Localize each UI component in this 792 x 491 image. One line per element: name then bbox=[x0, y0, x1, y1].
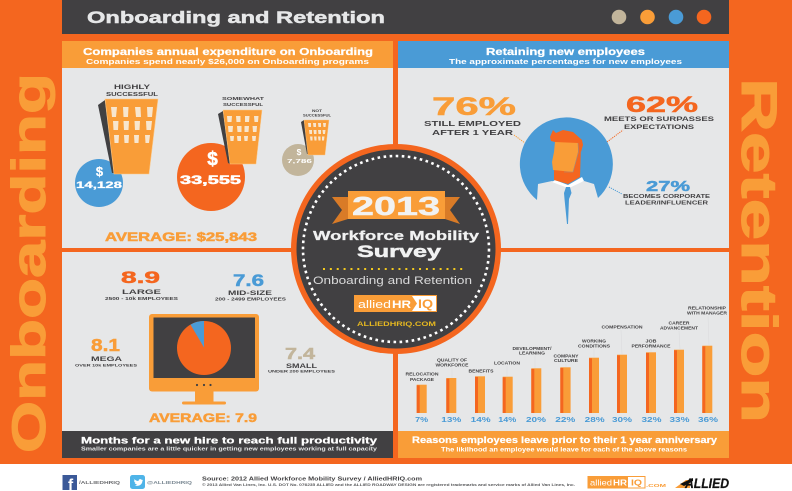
average months: AVERAGE: 7.9 bbox=[149, 411, 257, 425]
somewhat successful: spend circle bbox=[177, 143, 245, 211]
stat: small companies bbox=[268, 346, 335, 374]
bar labels: CAREER bbox=[668, 320, 691, 326]
stat: 27% becomes leader: LEADER/INFLUENCER bbox=[625, 200, 709, 206]
stat: large companies: 2500 - 10k EMPLOYEES bbox=[105, 296, 178, 301]
bar percentages: 33% bbox=[670, 417, 691, 424]
not successful: amount: 7,786 bbox=[287, 159, 313, 165]
highly successful: label: HIGHLY bbox=[114, 85, 150, 91]
highly successful: amount bbox=[76, 164, 122, 190]
pie chart bbox=[177, 321, 231, 375]
bar percentages: 32% bbox=[642, 417, 663, 424]
bar percentages: 28% bbox=[585, 417, 606, 424]
panel footer: Reasons employees leave prior to their 1 year anniversary bbox=[412, 435, 718, 446]
bar labels: RELOCATION bbox=[406, 372, 438, 376]
footer band bbox=[0, 464, 792, 491]
icon: employee portrait bbox=[520, 117, 613, 224]
logo: alliedHR IQ: IQ bbox=[418, 299, 433, 311]
highly successful: amount: $ bbox=[96, 164, 104, 179]
bar percentages: 30% bbox=[612, 417, 633, 424]
logo: alliedHR IQ: HR bbox=[392, 299, 411, 311]
not successful: label: NOT bbox=[312, 109, 322, 113]
highly successful: building icon bbox=[98, 99, 158, 174]
stat: 62% meets or surpasses: EXPECTATIONS bbox=[624, 124, 694, 131]
somewhat successful: label: SUCCESSFUL bbox=[223, 102, 263, 107]
stat: 76% still employed bbox=[424, 93, 521, 137]
stat: mid-size companies: 200 - 2499 EMPLOYEES bbox=[215, 296, 286, 302]
somewhat successful: building icon bbox=[218, 110, 262, 164]
not successful: building icon bbox=[301, 120, 329, 155]
icon: computer monitor with pie chart bbox=[149, 314, 259, 404]
icon: facebook bbox=[62, 475, 77, 491]
bar labels: WITH MANAGER bbox=[687, 310, 728, 316]
panel footer: Smaller companies are a little quicker in getting new employees working at full capacity bbox=[81, 446, 378, 452]
not successful: spend circle bbox=[282, 144, 314, 176]
bar percentages bbox=[415, 417, 719, 424]
bar percentages: 14% bbox=[498, 417, 517, 424]
stat: mid-size companies: 7.6 bbox=[233, 272, 264, 290]
bar labels bbox=[406, 306, 728, 382]
copyright line: © 2013 Allied Van Lines, Inc. U.S. DOT No. 076235 ALLIED and the ALLIED ROADWAY DESIGN are registered trademarks and service marks of Allied Van Lines, Inc. bbox=[202, 483, 575, 487]
panel: reasons employees leave bbox=[398, 252, 729, 458]
bar labels: DEVELOPMENT/ bbox=[512, 346, 552, 351]
stat: small companies: 7.4 bbox=[285, 346, 316, 363]
panel: annual expenditure on onboarding bbox=[62, 41, 393, 248]
stat: large companies bbox=[105, 268, 178, 301]
panel heading bbox=[398, 41, 729, 68]
panel heading: Companies spend nearly $26,000 on Onboarding programs bbox=[86, 57, 369, 66]
logo: alliedHR IQ bbox=[354, 295, 437, 312]
footer logo: alliedHR IQ: IQ bbox=[631, 478, 642, 488]
stat: large companies: LARGE bbox=[122, 289, 162, 296]
badge title: Workforce Mobility bbox=[313, 229, 479, 243]
panel footer: The likilhood an employee would leave for each of the above reasons bbox=[441, 448, 688, 454]
stat: 62% meets or surpasses: MEETS OR SURPASSES bbox=[604, 116, 714, 123]
bar labels: RELATIONSHIP bbox=[688, 306, 726, 310]
bar labels: CONDITIONS bbox=[578, 344, 610, 348]
stat: 76% still employed: 76% bbox=[432, 93, 516, 121]
stat: 62% meets or surpasses: 62% bbox=[626, 92, 698, 117]
bar labels: BENEFITS bbox=[468, 368, 494, 374]
panel footer: Months for a new hire to reach full productivity bbox=[81, 436, 378, 446]
bar labels: PACKAGE bbox=[410, 377, 434, 382]
somewhat successful: amount bbox=[180, 149, 242, 187]
bar labels: COMPENSATION bbox=[602, 324, 642, 330]
bar labels: LOCATION bbox=[494, 360, 520, 366]
connector lines bbox=[514, 130, 623, 194]
not successful: label: SUCCESSFUL bbox=[303, 114, 331, 118]
footer logo: Allied: ALLIED bbox=[684, 476, 729, 491]
stat: small companies: SMALL bbox=[286, 363, 317, 370]
stat: mid-size companies bbox=[215, 272, 286, 302]
not successful: amount bbox=[287, 147, 313, 165]
bar labels: QUALITY OF bbox=[437, 358, 467, 362]
stat: mega companies: OVER 10k EMPLOYEES bbox=[75, 362, 137, 368]
bar percentages: 22% bbox=[555, 417, 576, 424]
side title: Retention: Retention bbox=[731, 78, 787, 423]
panel heading: Companies annual expenditure on Onboarding bbox=[83, 47, 373, 58]
panel heading bbox=[62, 41, 393, 68]
stat: mega companies: MEGA bbox=[91, 356, 123, 363]
icon: twitter bbox=[130, 475, 145, 489]
somewhat successful: label: SOMEWHAT bbox=[222, 96, 264, 102]
footer logo suffix: .COM bbox=[646, 483, 666, 489]
stat: 27% becomes leader bbox=[623, 178, 711, 206]
panel: retaining new employees bbox=[398, 41, 729, 248]
stat: mega companies: 8.1 bbox=[91, 335, 120, 355]
footer logo: alliedHR IQ bbox=[588, 476, 646, 488]
bar percentages: 14% bbox=[471, 417, 492, 424]
bar labels: JOB bbox=[646, 338, 656, 344]
highly successful: amount: 14,128 bbox=[76, 180, 122, 190]
stat: large companies: 8.9 bbox=[121, 268, 160, 287]
twitter handle: @ALLIEDHRIQ bbox=[147, 480, 193, 485]
title: Onboarding and Retention bbox=[87, 9, 385, 27]
panel heading: Retaining new employees bbox=[486, 47, 646, 58]
colour dots bbox=[612, 10, 711, 24]
somewhat successful: amount: $ bbox=[207, 149, 218, 170]
source line: Source: 2012 Allied Workforce Mobility Survey / AlliedHRIQ.com bbox=[202, 476, 423, 482]
stat: mid-size companies: MID-SIZE bbox=[228, 290, 272, 297]
stat: 27% becomes leader: 27% bbox=[646, 178, 690, 195]
not successful: label bbox=[303, 109, 331, 118]
central survey badge bbox=[291, 144, 501, 354]
highly successful: spend circle bbox=[75, 159, 123, 207]
bar labels: COMPANY bbox=[554, 354, 579, 358]
badge title: Survey bbox=[357, 243, 442, 261]
facebook handle: /ALLIEDHRIQ bbox=[79, 480, 121, 485]
bar percentages: 36% bbox=[698, 417, 719, 424]
ribbon with year bbox=[332, 191, 460, 224]
bar labels: CULTURE bbox=[554, 358, 578, 363]
badge title bbox=[313, 229, 479, 261]
bar labels: WORKFORCE bbox=[436, 362, 469, 368]
somewhat successful: amount: 33,555 bbox=[180, 173, 242, 187]
bar labels: PERFORMANCE bbox=[632, 344, 671, 348]
average expenditure: AVERAGE: $25,843 bbox=[105, 230, 257, 244]
bar labels: WORKING bbox=[582, 338, 607, 344]
stat: 62% meets or surpasses bbox=[604, 92, 714, 131]
bar labels: LEARNING bbox=[519, 350, 546, 356]
logo: alliedHR IQ: allied bbox=[358, 299, 391, 311]
badge subtitle: Onboarding and Retention bbox=[313, 275, 472, 287]
bar chart bbox=[406, 306, 728, 424]
panel heading: The approximate percentages for new employees bbox=[449, 57, 682, 66]
panel: months to full productivity bbox=[62, 252, 393, 458]
highly successful: label: SUCCESSFUL bbox=[106, 92, 158, 98]
somewhat successful: label bbox=[222, 96, 264, 107]
footer logo: alliedHR IQ: allied bbox=[590, 478, 612, 488]
bar labels: ADVANCEMENT bbox=[660, 326, 698, 330]
stat: 76% still employed: AFTER 1 YEAR bbox=[432, 130, 513, 137]
stat: 27% becomes leader: BECOMES CORPORATE bbox=[623, 194, 711, 200]
stat: 76% still employed: STILL EMPLOYED bbox=[424, 121, 521, 128]
ribbon with year: 2013 bbox=[352, 191, 440, 221]
website: ALLIEDHRIQ.COM bbox=[357, 322, 436, 328]
stat: mega companies bbox=[75, 335, 137, 368]
side title: Onboarding: Onboarding bbox=[2, 73, 55, 453]
bar percentages: 20% bbox=[526, 417, 547, 424]
stat: small companies: UNDER 200 EMPLOYEES bbox=[268, 368, 335, 374]
bar percentages: 13% bbox=[441, 417, 462, 424]
bar percentages: 7% bbox=[415, 417, 429, 424]
panel footer bbox=[398, 431, 729, 458]
highly successful: label bbox=[106, 85, 158, 98]
not successful: amount: $ bbox=[297, 147, 302, 157]
footer logo: alliedHR IQ: HR bbox=[613, 478, 627, 488]
panel footer bbox=[62, 431, 393, 458]
header bar bbox=[62, 0, 729, 34]
